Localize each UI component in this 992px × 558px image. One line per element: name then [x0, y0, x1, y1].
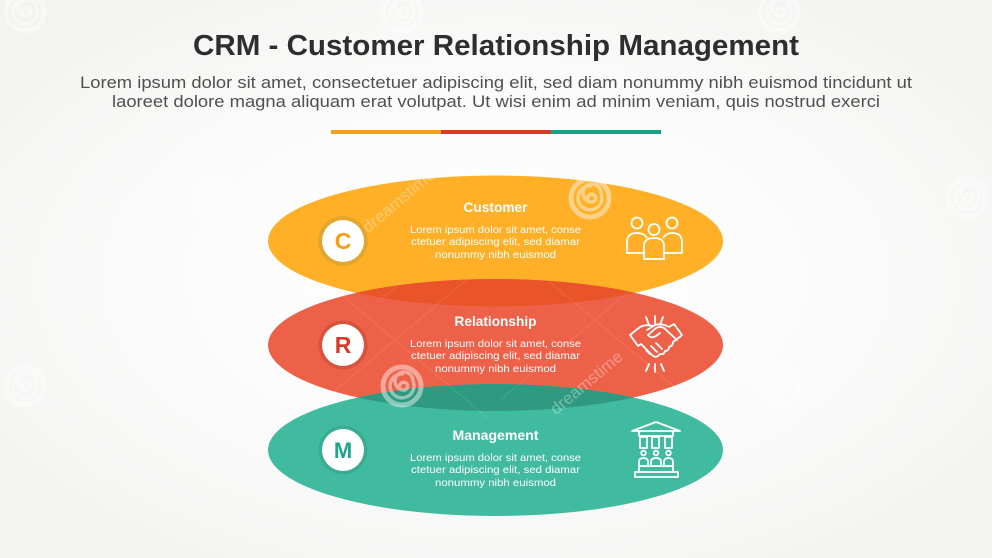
text: dreamstime	[546, 347, 627, 419]
subtitle text: Lorem ipsum dolor sit amet, consectetuer adipiscing elit, sed diam nonummy nibh euismod tincidunt ut	[80, 73, 912, 92]
icon: people	[627, 218, 682, 259]
body text: customer: ctetuer adipiscing elit, sed diamar	[411, 236, 581, 248]
badge: C: C	[335, 228, 351, 254]
badge: C	[318, 216, 368, 266]
body text: customer: Lorem ipsum dolor sit amet, conse	[410, 224, 581, 236]
badge: R: R	[335, 332, 352, 358]
panel: relationship	[268, 279, 723, 398]
body text: relationship	[410, 338, 581, 375]
subtitle text	[80, 73, 912, 111]
overlap: customer and relationship	[356, 279, 635, 306]
text: dreamstime	[358, 165, 439, 237]
panel: customer	[268, 176, 723, 306]
tricolor divider	[331, 130, 661, 134]
body text: relationship: Lorem ipsum dolor sit amet, conse	[410, 338, 581, 350]
badge: M: M	[334, 438, 352, 463]
body text: management: ctetuer adipiscing elit, sed diamar	[411, 464, 581, 476]
badge: M	[318, 426, 368, 474]
badge: R	[318, 320, 368, 370]
body text: relationship: nonummy nibh euismod	[435, 363, 556, 375]
body text: customer	[410, 224, 581, 261]
icon: handshake	[630, 316, 682, 372]
title: CRM - Customer Relationship Management	[193, 30, 799, 62]
heading: relationship: Relationship	[454, 313, 536, 329]
overlap: relationship and management	[358, 384, 633, 411]
body text: customer: nonummy nibh euismod	[435, 249, 556, 261]
subtitle text: laoreet dolore magna aliquam erat volutpat. Ut wisi enim ad minim veniam, quis nostrud exerci	[112, 92, 880, 111]
panel: management	[268, 384, 723, 516]
body text: management: Lorem ipsum dolor sit amet, conse	[410, 452, 581, 464]
icon: institution building	[632, 422, 680, 477]
heading: customer: Customer	[464, 199, 528, 215]
body text: management: nonummy nibh euismod	[435, 477, 556, 489]
body text: management	[410, 452, 581, 489]
body text: relationship: ctetuer adipiscing elit, sed diamar	[411, 350, 581, 362]
heading: management: Management	[452, 427, 539, 443]
